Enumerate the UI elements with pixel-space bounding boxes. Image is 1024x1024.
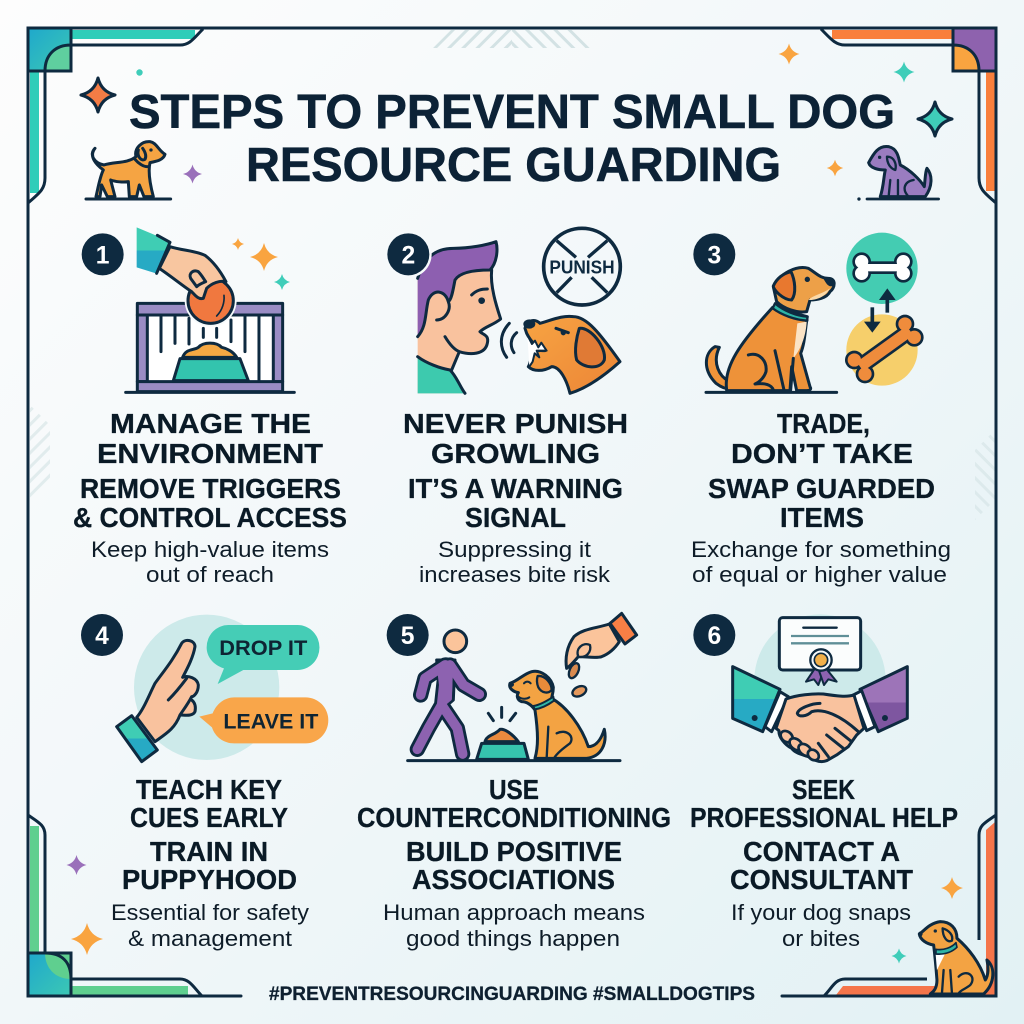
subheading: SWAP GUARDED (708, 473, 935, 504)
icon: no punish sign (544, 228, 620, 305)
frame: top-left corner (28, 28, 203, 203)
heading (403, 408, 628, 469)
heading: NEVER PUNISH (403, 408, 628, 439)
hashtag footer: #PREVENTRESOURCINGUARDING #SMALLDOGTIPS (269, 984, 755, 1005)
subheading (122, 836, 297, 895)
body text: Keep high-value items (91, 537, 329, 562)
number badge 2 (385, 231, 432, 278)
body text (383, 900, 645, 951)
subheading: SIGNAL (465, 502, 566, 533)
icon: sitting purple dog (857, 146, 939, 201)
heading: TRADE, (777, 408, 870, 439)
number badge 1: 1 (96, 242, 110, 269)
body text: good things happen (406, 926, 620, 951)
illustration: pointing hand with cue bubbles: DROP IT (219, 635, 307, 660)
heading (97, 408, 323, 469)
subheading: ASSOCIATIONS (412, 864, 615, 895)
body text: or bites (782, 926, 860, 951)
body text: Suppressing it (438, 537, 591, 562)
subheading: REMOVE TRIGGERS (80, 473, 341, 504)
number badge 4: 4 (95, 623, 109, 650)
body text: Exchange for something (691, 537, 951, 562)
body text (91, 537, 329, 587)
heading: PROFESSIONAL HELP (690, 802, 958, 833)
subheading: ITEMS (780, 502, 864, 533)
illustration: pointing hand with cue bubbles: LEAVE IT (223, 708, 318, 733)
panel: step 2 (385, 228, 628, 587)
number badge 4 (81, 614, 123, 656)
icon: walking orange dog (86, 142, 171, 199)
title (129, 86, 895, 192)
heading: SEEK (792, 774, 855, 805)
body text: Essential for safety (111, 900, 309, 925)
number badge 5 (387, 614, 429, 656)
illustration: pointing hand with cue bubbles (117, 615, 328, 762)
number badge 1 (82, 233, 124, 275)
frame: top-right corner (821, 28, 996, 203)
heading: MANAGE THE (110, 408, 311, 439)
heading: USE (489, 774, 539, 805)
panel: step 6 (690, 614, 958, 951)
subheading (730, 836, 913, 895)
subheading: & CONTROL ACCESS (73, 502, 347, 533)
panel: step 3 (691, 233, 951, 587)
illustration: hand dropping ball in gated bowl (126, 227, 294, 392)
body text: of equal or higher value (692, 562, 947, 587)
subheading: CONTACT A (743, 836, 900, 867)
panel: step 1 (73, 227, 347, 587)
illustration: person and growling dog (418, 242, 620, 393)
number badge 2: 2 (401, 242, 415, 269)
heading (690, 774, 958, 833)
body text (731, 900, 911, 951)
heading (130, 774, 288, 833)
subheading: PUPPYHOOD (122, 864, 297, 895)
body text: If your dog snaps (731, 900, 911, 925)
number badge 6 (693, 614, 735, 656)
frame: bottom-left corner (28, 815, 202, 996)
sparkles (232, 238, 290, 290)
subheading: TRAIN IN (150, 836, 268, 867)
body text: out of reach (146, 562, 274, 587)
title: STEPS TO PREVENT SMALL DOG (129, 86, 895, 139)
frame: bottom-right corner (824, 815, 996, 996)
icon: corner dog (918, 922, 993, 994)
subheading: IT’S A WARNING (408, 473, 623, 504)
subheading (73, 473, 347, 533)
heading: ENVIRONMENT (97, 438, 323, 469)
number badge 3 (693, 233, 735, 275)
heading (731, 408, 913, 469)
body text: increases bite risk (419, 562, 611, 587)
body text (691, 537, 951, 587)
illustration: sitting dog and bone swap (706, 233, 924, 392)
number badge 5: 5 (401, 623, 415, 650)
icon: no punish sign: PUNISH (549, 256, 615, 277)
title: RESOURCE GUARDING (246, 139, 781, 192)
heading (357, 774, 671, 833)
subheading: BUILD POSITIVE (406, 836, 622, 867)
panel: step 4 (81, 614, 328, 951)
subheading (408, 473, 623, 533)
body text: & management (128, 926, 292, 951)
illustration: certificate and handshake (733, 614, 907, 762)
body text: Human approach means (383, 900, 645, 925)
subheading (406, 836, 622, 895)
illustration: person approaching dog with treats (408, 613, 637, 761)
heading: GROWLING (431, 438, 600, 469)
subheading (708, 473, 935, 533)
heading: CUES EARLY (130, 802, 288, 833)
panel: step 5 (357, 613, 671, 951)
sparkles around title (66, 44, 963, 964)
number badge 6: 6 (707, 623, 721, 650)
heading: COUNTERCONDITIONING (357, 802, 671, 833)
number badge 3: 3 (707, 242, 721, 269)
body text (111, 900, 309, 951)
body text (419, 537, 611, 587)
heading: DON’T TAKE (731, 438, 913, 469)
subheading: CONSULTANT (730, 864, 913, 895)
heading: TEACH KEY (136, 774, 282, 805)
